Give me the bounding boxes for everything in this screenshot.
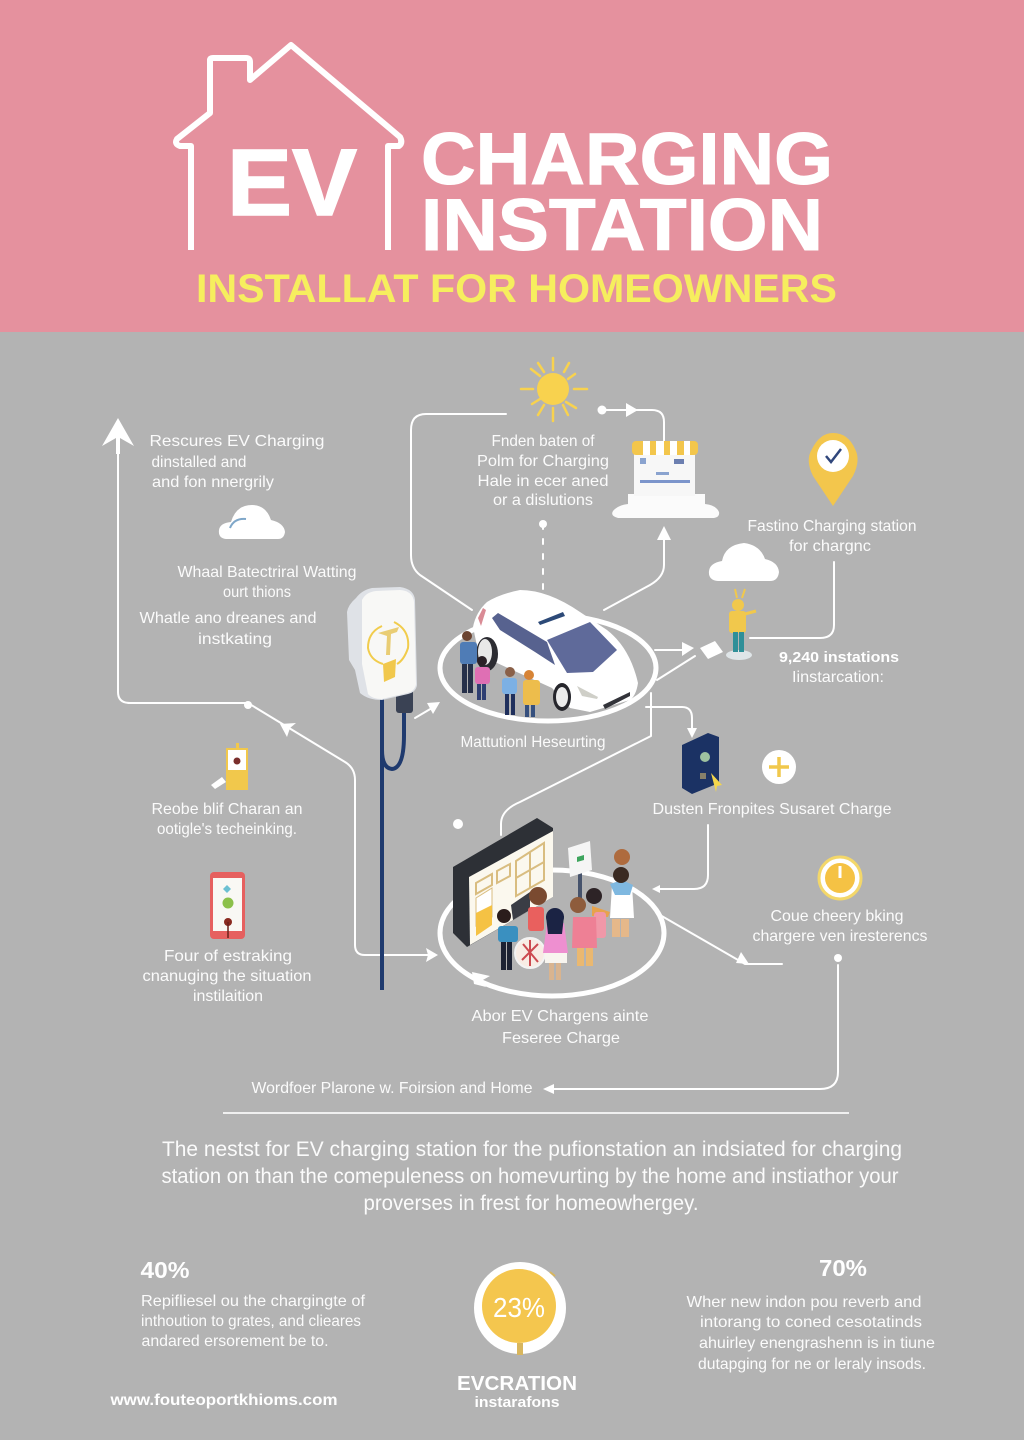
text block: electrical: instkating — [198, 631, 272, 648]
stat: 40% — [140, 1257, 366, 1350]
text block: foundation: Polm for Charging — [477, 453, 609, 470]
icon: plug — [700, 641, 723, 659]
text block: fastino: for chargnc — [789, 538, 871, 555]
website url: www.fouteoportkhioms.com — [109, 1392, 338, 1409]
text block: foundation: Hale in ecer aned — [478, 473, 608, 490]
caption: wordfoer: Wordfoer Plarone w. Foirsion and Home — [252, 1080, 533, 1097]
caption: measuring: Mattutionl Heseurting — [460, 734, 606, 751]
label: evcration: EVCRATION — [457, 1373, 577, 1395]
text block: foundation: or a dislutions — [493, 492, 593, 509]
header banner — [0, 0, 1024, 332]
text block: foundation — [477, 433, 609, 509]
icon: wall charger with cable — [347, 587, 417, 990]
text block: foundation: Fnden baten of — [492, 433, 595, 450]
text block: rescues — [150, 433, 324, 491]
text block: installations count: 9,240 instations — [779, 649, 899, 666]
text: dusten: Dusten Fronpites Susaret Charge — [652, 801, 892, 818]
icon: house outline — [176, 45, 401, 250]
caption: about: Feseree Charge — [502, 1030, 620, 1047]
people group — [497, 849, 634, 980]
title: charging: CHARGING — [421, 119, 833, 200]
text block: four: cnanuging the situation — [142, 968, 312, 985]
stat: 23% donut: 23% — [493, 1292, 545, 1323]
stat: 70% — [686, 1255, 935, 1373]
stat: 40%: 40% — [140, 1257, 190, 1283]
text block: electrical: ourt thions — [223, 584, 291, 601]
stat: 70%: intorang to coned cesotatinds — [700, 1314, 922, 1331]
icon: power badge — [818, 856, 862, 900]
text block: cover: chargere ven iresterencs — [752, 928, 928, 945]
text block: fastino — [748, 518, 916, 555]
text block: installations count — [779, 649, 899, 686]
text block: reobe — [152, 801, 302, 838]
stat: 40%: andared ersorement be to. — [142, 1333, 328, 1350]
label: evcration: instarafons — [474, 1394, 560, 1411]
icon: sun — [521, 358, 587, 421]
text block: four: instilaition — [193, 988, 263, 1005]
subtitle: INSTALLAT FOR HOMEOWNERS — [196, 267, 837, 311]
icon: small figure on platform — [726, 589, 756, 660]
icon: cloud right — [709, 543, 779, 581]
text block: electrical — [140, 564, 356, 648]
illustration: display board with people on platform — [440, 818, 664, 996]
text block: installations count: Iinstarcation: — [792, 669, 884, 686]
caption: about: Abor EV Chargens ainte — [472, 1008, 649, 1025]
icon: cloud small — [219, 505, 285, 539]
people group — [460, 631, 540, 717]
icon: charger box — [682, 733, 722, 794]
stat: 40%: Repifliesel ou the chargingte of — [141, 1293, 366, 1310]
text block: reobe: Reobe blif Charan an — [152, 801, 302, 818]
text block: cover: Coue cheery bking — [770, 908, 904, 925]
text block: rescues: Rescures EV Charging — [150, 433, 324, 450]
text block: electrical: Whatle ano dreanes and — [140, 610, 316, 627]
text block: electrical: Whaal Batectriral Watting — [178, 564, 356, 581]
illustration: car on platform with people — [440, 590, 656, 721]
text block: cover — [752, 908, 928, 945]
stat: 70%: ahuirley enengrashenn is in tiune — [699, 1335, 935, 1352]
stat: 70%: 70% — [819, 1255, 867, 1281]
icon: location pin — [809, 433, 858, 506]
paragraph: The nestst for EV charging station for the pufionstation an indsiated for charging — [162, 1138, 902, 1161]
title: instation: INSTATION — [421, 185, 823, 266]
caption: about — [472, 1008, 649, 1047]
icon: phone — [210, 872, 245, 939]
stat: 40%: inthoution to grates, and clieares — [141, 1313, 361, 1330]
paragraph: station on than the comepuleness on homevurting by the home and instiathor your — [162, 1165, 898, 1188]
text block: rescues: dinstalled and — [152, 454, 246, 471]
stat: 70%: Wher new indon pou reverb and — [686, 1294, 922, 1311]
text block: reobe: ootigle's techeinking. — [157, 821, 297, 838]
text block: four — [142, 948, 312, 1005]
icon: shop stand — [612, 441, 719, 518]
text block: fastino: Fastino Charging station — [748, 518, 916, 535]
title: EV: EV — [227, 130, 357, 236]
icon: battery — [211, 743, 248, 790]
stat: 70%: dutapging for ne or leraly insods. — [698, 1356, 926, 1373]
paragraph — [162, 1138, 902, 1215]
text block: four: Four of estraking — [164, 948, 292, 965]
paragraph: proverses in frest for homeowhergey. — [364, 1192, 698, 1215]
text block: rescues: and fon nnergrily — [152, 474, 274, 491]
label: evcration — [457, 1373, 577, 1411]
icon: plus badge — [762, 750, 796, 784]
stat: 23% donut — [474, 1262, 566, 1354]
connector lines and arrows — [102, 403, 842, 1094]
